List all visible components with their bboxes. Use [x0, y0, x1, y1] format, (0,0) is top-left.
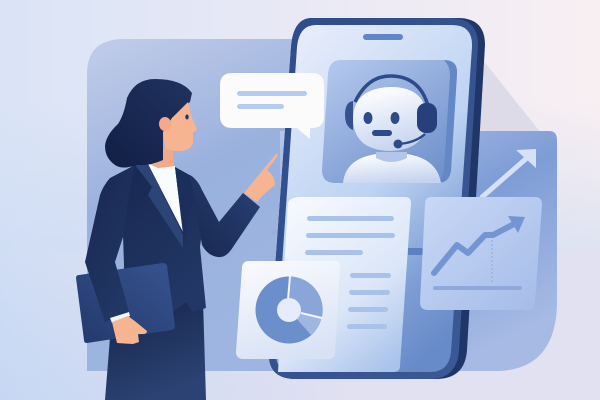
chat bubble	[220, 73, 324, 139]
eye	[185, 114, 189, 120]
headset	[345, 76, 437, 148]
jacket	[112, 162, 260, 312]
hair	[105, 79, 192, 168]
avatar card	[322, 60, 457, 183]
cuff	[110, 312, 130, 323]
pointing hand	[244, 154, 278, 202]
chart guide	[491, 240, 493, 283]
pie card	[236, 261, 340, 359]
skirt	[105, 300, 206, 400]
blouse	[147, 163, 183, 236]
document	[278, 197, 411, 372]
robot neck	[376, 152, 407, 162]
holding hand	[112, 316, 147, 344]
phone screen	[276, 25, 472, 372]
trend arrow	[481, 149, 536, 198]
robot head	[353, 87, 427, 151]
woman	[76, 79, 278, 400]
phone speaker	[363, 34, 403, 40]
phone	[269, 18, 485, 379]
robot body	[343, 153, 441, 183]
ear	[159, 117, 171, 131]
left sleeve	[85, 165, 135, 322]
robot face	[364, 112, 400, 136]
right lapel	[175, 167, 193, 248]
lapel	[135, 162, 183, 248]
chart line	[434, 216, 525, 273]
chart baseline	[433, 286, 522, 290]
connector arrow	[408, 239, 441, 264]
neck	[147, 148, 175, 170]
face	[163, 102, 197, 151]
tablet	[76, 263, 175, 343]
donut chart	[256, 276, 323, 344]
document lines	[305, 216, 395, 329]
backdrop panel	[87, 39, 557, 371]
chart card	[420, 197, 542, 310]
raised sleeve	[190, 175, 260, 257]
